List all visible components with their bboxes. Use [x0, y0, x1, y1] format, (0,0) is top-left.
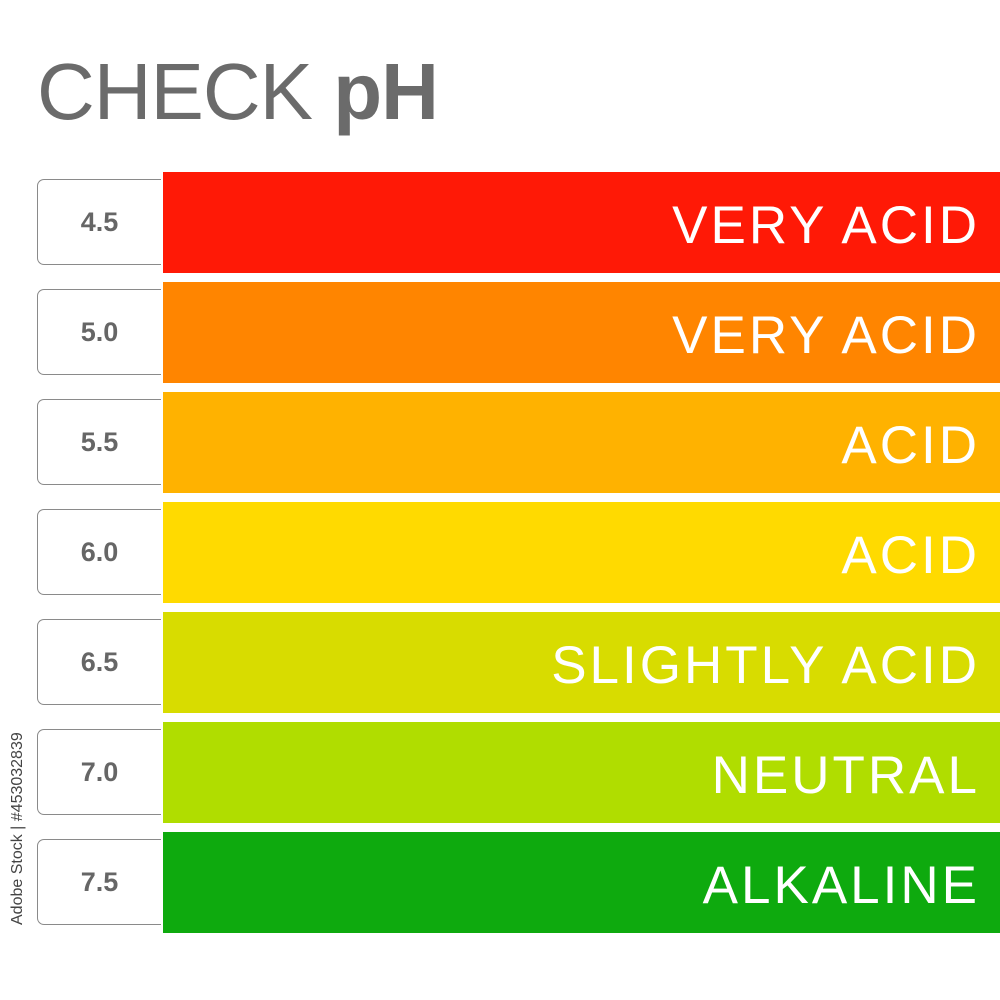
row: 4.5 very acid: VERY ACID — [672, 196, 980, 255]
title: CHECK pH — [37, 47, 438, 136]
row: 7.5 alkaline: 7.5 — [81, 866, 118, 896]
row: 7.0 neutral: NEUTRAL — [712, 746, 980, 805]
row: 5.5 acid: ACID — [841, 416, 980, 475]
row: 7.0 neutral — [37, 722, 1000, 823]
row: 4.5 very acid: 4.5 — [81, 206, 118, 236]
row: 6.0 acid: 6.0 — [81, 536, 118, 566]
row: 6.0 acid — [37, 502, 1000, 603]
row: 5.0 very acid — [37, 282, 1000, 383]
watermark text: Adobe Stock | #453032839 — [9, 732, 26, 925]
row: 7.5 alkaline: ALKALINE — [703, 856, 980, 915]
row: 6.5 slightly acid: SLIGHTLY ACID — [551, 636, 980, 695]
row: 5.0 very acid: 5.0 — [81, 316, 118, 346]
row: 4.5 very acid — [37, 172, 1000, 273]
row: 5.0 very acid: VERY ACID — [672, 306, 980, 365]
row: 5.5 acid: 5.5 — [81, 426, 118, 456]
row: 6.0 acid: ACID — [841, 526, 980, 585]
row: 6.5 slightly acid: 6.5 — [81, 646, 118, 676]
row: 5.5 acid — [37, 392, 1000, 493]
row: 6.5 slightly acid — [37, 612, 1000, 713]
row: 7.0 neutral: 7.0 — [81, 756, 118, 786]
row: 7.5 alkaline — [37, 832, 1000, 933]
